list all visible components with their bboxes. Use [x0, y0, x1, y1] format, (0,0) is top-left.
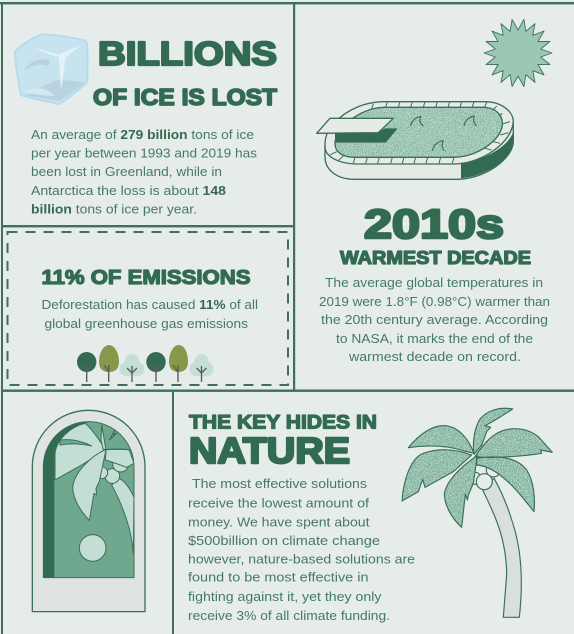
- text: ice loss description: An average of 279 billion tons of ice: [31, 127, 254, 142]
- text: warmest decade description: the 20th century average. According: [321, 312, 548, 327]
- text: nature description: The most effective solutions: [192, 476, 368, 491]
- heading: of ice is lost: OF ICE IS LOST: [93, 84, 278, 110]
- text: deforestation description: [42, 297, 258, 331]
- icon: sun: [484, 20, 552, 86]
- text: ice loss description: billion tons of ice per year.: [31, 202, 197, 216]
- text: ice loss description: [31, 127, 258, 216]
- panel: key hides in nature: [188, 408, 552, 623]
- heading: warmest decade: WARMEST DECADE: [340, 248, 531, 268]
- panel: emissions: [8, 232, 288, 385]
- text: warmest decade description: to NASA, it marks the end of the: [336, 331, 533, 346]
- heading: 11% of emissions: 11% OF EMISSIONS: [42, 267, 251, 289]
- heading: the key hides in: THE KEY HIDES IN: [189, 412, 377, 434]
- text: deforestation description: global greenhouse gas emissions: [44, 316, 249, 331]
- text: nature description: $500billion on climate change: [188, 533, 380, 548]
- text: nature description: found to be most effective in: [188, 570, 368, 585]
- text: warmest decade description: 2019 were 1.8°F (0.98°C) warmer than: [319, 294, 550, 309]
- text: nature description: money. We have spent about: [188, 515, 370, 530]
- icon: swimming pool: [317, 102, 513, 179]
- text: nature description: receive 3% of all climate funding.: [188, 608, 390, 623]
- text: ice loss description: Antarctica the loss is about 148: [31, 183, 226, 198]
- icon: palm tree: [402, 408, 552, 617]
- text: nature description: fighting against it, yet they only: [188, 589, 382, 604]
- text: nature description: however, nature-based solutions are: [188, 551, 415, 566]
- icon: row of trees: [77, 345, 214, 382]
- icon: ice cube: [15, 34, 88, 104]
- text: warmest decade description: warmest decade on record.: [348, 349, 521, 364]
- text: nature description: [188, 476, 415, 623]
- text: nature description: receive the lowest amount of: [188, 496, 369, 511]
- panel: warmest decade: [317, 20, 552, 364]
- heading: nature: NATURE: [189, 430, 350, 471]
- dashed frame: [8, 232, 288, 385]
- text: ice loss description: per year between 1993 and 2019 has: [31, 146, 258, 160]
- text: warmest decade description: The average global temperatures in: [325, 275, 543, 290]
- heading: billions: BILLIONS: [98, 35, 277, 72]
- panel: ice loss: [15, 34, 278, 217]
- heading: 2010s: 2010s: [364, 201, 504, 247]
- text: warmest decade description: [319, 275, 550, 364]
- text: deforestation description: Deforestation has caused 11% of all: [42, 297, 258, 312]
- text: ice loss description: been lost in Greenland, while in: [31, 164, 222, 179]
- icon: arched window with palm: [32, 410, 145, 612]
